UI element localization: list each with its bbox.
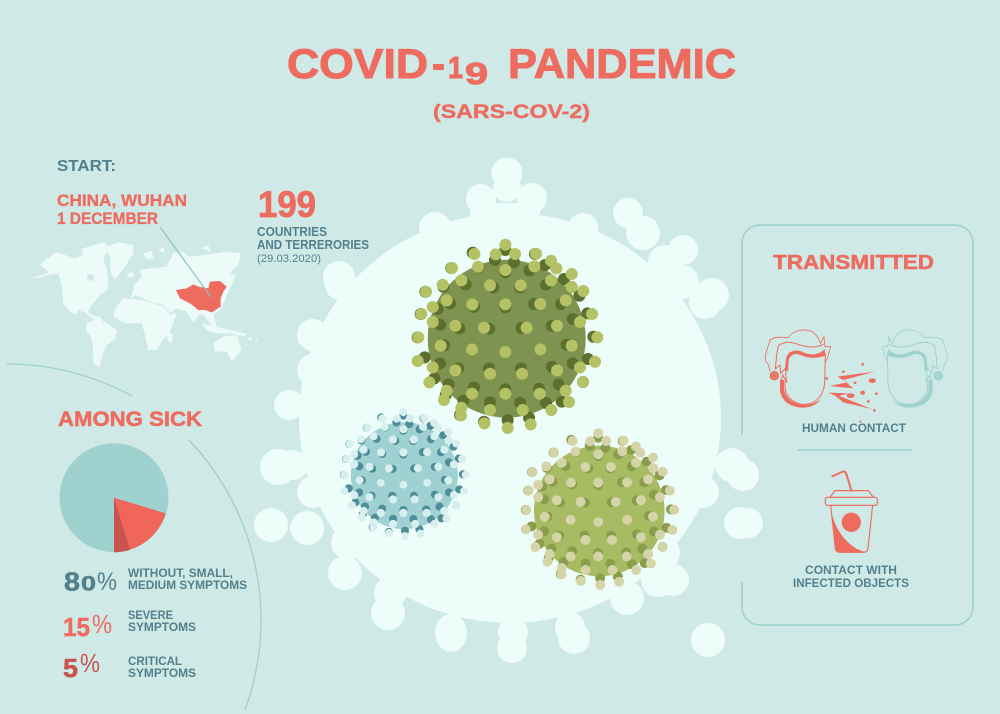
panel frame — [742, 225, 973, 625]
among sick heading: AMONG SICK — [58, 408, 202, 431]
icon: infected head — [765, 330, 831, 408]
country count: 199 — [258, 184, 316, 225]
icon: healthy head — [882, 330, 948, 408]
origin text — [57, 192, 187, 228]
stat: 5 percent: 5 — [63, 653, 78, 683]
stat: 80 percent: 8 — [64, 566, 80, 596]
icon: droplets — [825, 363, 878, 423]
title: 1 — [448, 50, 463, 85]
icon: infected cup — [825, 471, 877, 552]
virus: small blue — [344, 412, 466, 536]
country count — [257, 184, 369, 265]
stat: 80 percent: 0 — [81, 572, 96, 596]
label: infected objects: CONTACT WITH — [805, 565, 897, 577]
title — [287, 40, 736, 91]
virus: large dark green — [418, 245, 597, 428]
stat: 15 percent: % — [92, 609, 112, 639]
pie chart — [60, 443, 168, 552]
country count: AND TERRERORIES — [257, 238, 369, 252]
stat: 15 percent: SEVERE — [128, 610, 173, 622]
virus: medium light green — [526, 433, 674, 585]
panel: transmitted — [742, 225, 973, 625]
panel heading: TRANSMITTED — [773, 251, 934, 274]
icon: human contact — [765, 330, 948, 423]
label: infected objects — [793, 565, 909, 590]
label: human contact: HUMAN CONTACT — [802, 423, 906, 435]
pointer line to Wuhan — [160, 227, 211, 297]
title: PANDEMIC — [508, 40, 736, 87]
title: 9 — [465, 56, 488, 91]
origin text: CHINA, WUHAN — [57, 192, 187, 210]
stat: 15 percent: 15 — [63, 612, 90, 642]
stat: 5 percent: SYMPTOMS — [128, 668, 196, 680]
label: infected objects: INFECTED OBJECTS — [793, 578, 909, 590]
origin text: 1 DECEMBER — [57, 210, 158, 228]
left arc right — [189, 440, 261, 710]
subtitle: (SARS-COV-2) — [433, 101, 590, 123]
country count: (29.03.2020) — [257, 253, 321, 265]
stat: 5 percent — [63, 648, 196, 683]
eurasia, africa and australia — [113, 245, 258, 362]
world map — [30, 242, 258, 368]
stat: 15 percent: SYMPTOMS — [128, 622, 196, 634]
stat: 5 percent: CRITICAL — [128, 656, 182, 668]
stat: 80 percent — [64, 566, 247, 596]
title: COVID — [287, 40, 428, 87]
stat: 5 percent: % — [80, 648, 100, 678]
title: - — [432, 40, 445, 87]
stat: 80 percent: % — [97, 568, 117, 596]
stat: 80 percent: WITHOUT, SMALL, — [128, 568, 233, 580]
left arc top — [7, 364, 132, 396]
start label: START: — [57, 158, 116, 175]
china highlight — [176, 281, 227, 312]
white virus cloud background — [254, 158, 763, 663]
americas and greenland — [30, 242, 145, 368]
stat: 80 percent: MEDIUM SYMPTOMS — [128, 580, 247, 592]
country count: COUNTRIES — [257, 225, 327, 239]
stat: 15 percent — [63, 609, 196, 642]
